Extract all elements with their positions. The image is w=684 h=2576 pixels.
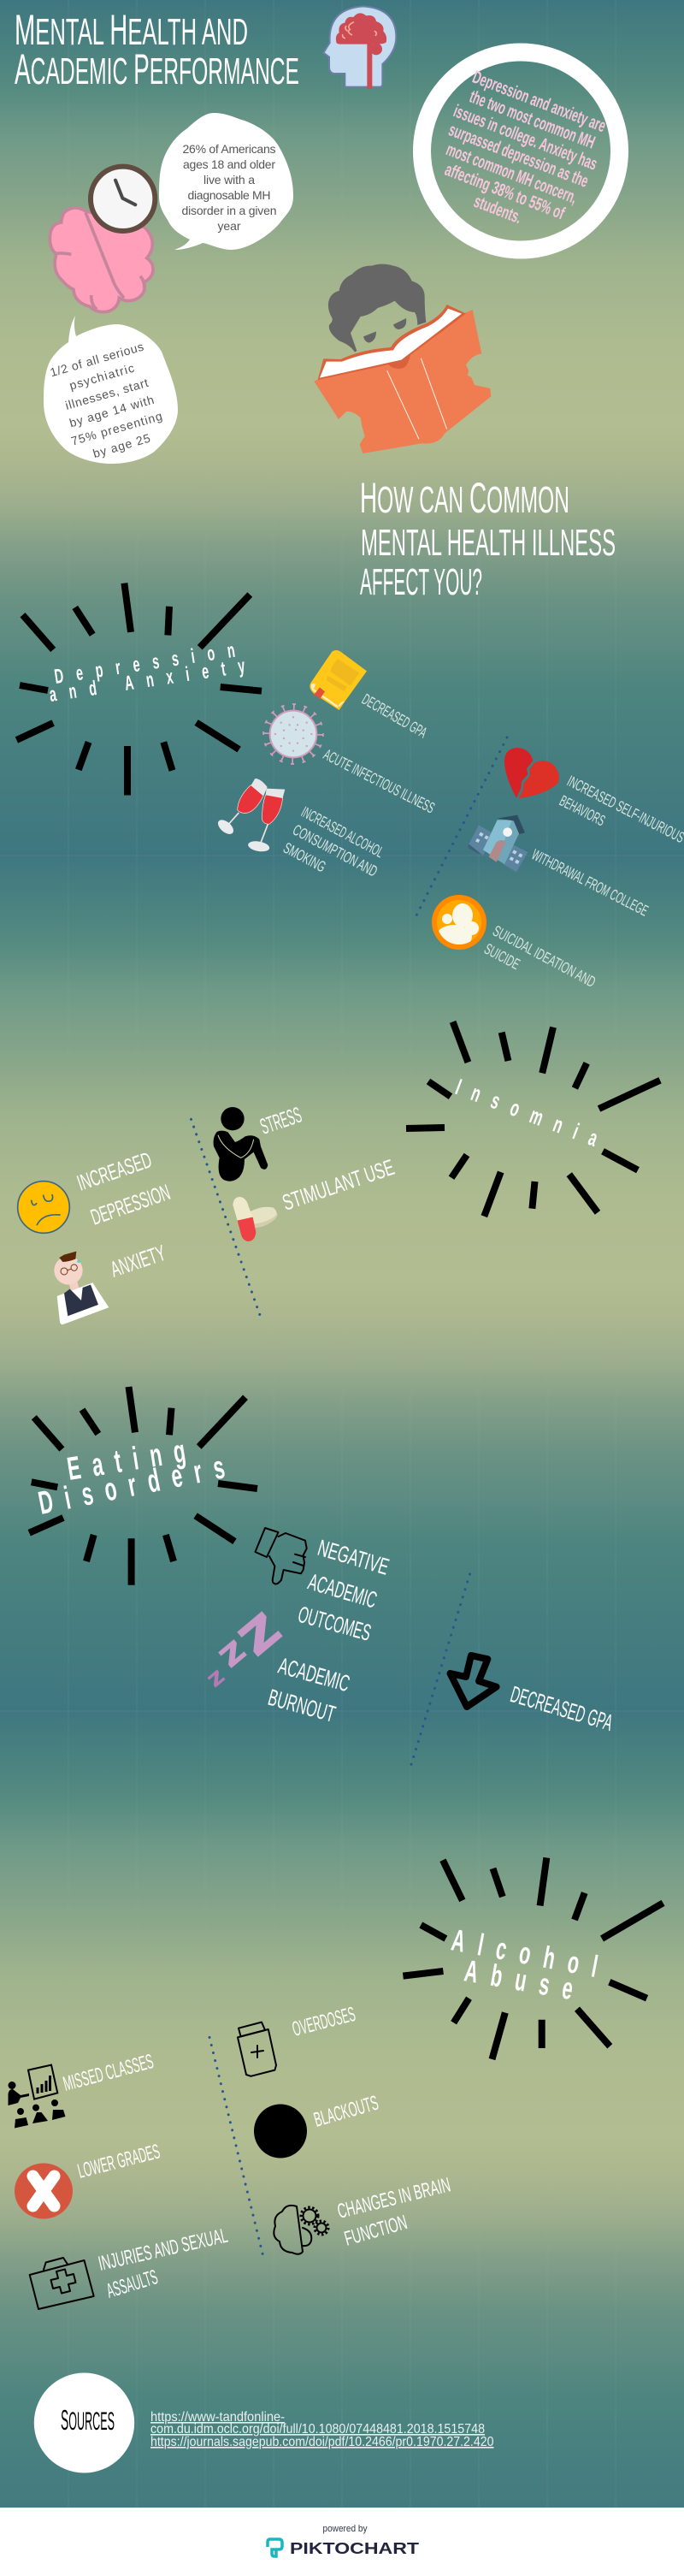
logo wordmark: PIKTOCHART: [290, 2539, 420, 2557]
source links: https://journals.sagepub.com/doi/pdf/10.2466/pr0.1970.27.2.420: [150, 2435, 494, 2449]
label: increased alcohol consumption and smoking: INCREASED ALCOHOL: [298, 803, 386, 861]
logo mark: [268, 2539, 282, 2556]
powered by text: powered by: [323, 2524, 368, 2534]
sources badge: SOURCES: [61, 2404, 115, 2436]
panel: header: [15, 6, 396, 93]
label: academic burnout: [265, 1653, 352, 1727]
panel: depression and anxiety statistic ring: [422, 52, 619, 250]
text: statistic: the two most common MH: [467, 87, 598, 153]
speech bubble: half of illnesses: 75% presenting: [69, 409, 163, 448]
burst title: Abuse: [462, 1954, 575, 2007]
text: statistic: most common MH concern,: [444, 139, 580, 208]
speech bubble: half of illnesses: [44, 316, 178, 465]
speech bubble: half of illnesses: psychiatric: [68, 361, 136, 393]
label: increased self-injurious behaviors: BEHAVIORS: [557, 792, 608, 829]
speech bubble: half of illnesses: by age 25: [91, 431, 152, 460]
label: academic burnout: ACADEMIC: [275, 1653, 352, 1697]
label: injuries and sexual assaults: ASSAULTS: [103, 2265, 161, 2303]
icon: brain with gears: [274, 2206, 328, 2254]
label: increased alcohol consumption and smoking: SMOKING: [280, 839, 328, 875]
ring: [422, 52, 619, 250]
panel: eating disorders: [29, 1387, 616, 1768]
label: academic burnout: BURNOUT: [265, 1685, 338, 1727]
burst title: Alcohol: [449, 1923, 600, 1984]
panel: brain and statistics: [44, 113, 491, 465]
speech bubble: half of illnesses: 1/2 of all serious: [49, 340, 145, 379]
label: suicidal ideation and suicide: SUICIDAL IDEATION AND: [490, 922, 598, 991]
label: blackouts: BLACKOUTS: [311, 2092, 381, 2132]
divider: dotted line: [416, 737, 507, 915]
divider: dotted line: [192, 1119, 261, 1317]
speech bubble: 26 percent: ages 18 and older: [183, 157, 275, 171]
divider: dotted line: [410, 1574, 470, 1768]
label: stimulant use: STIMULANT USE: [279, 1154, 398, 1216]
burst: depression and anxiety: [16, 583, 262, 796]
label: overdoses: OVERDOSES: [290, 2003, 358, 2041]
label: lower grades: LOWER GRADES: [75, 2140, 162, 2183]
title: [15, 6, 299, 93]
source links: https://www-tandfonline-: [150, 2410, 285, 2425]
title: ACADEMIC PERFORMANCE: [15, 45, 299, 93]
burst: alcohol abuse: [403, 1857, 663, 2059]
label: negative academic outcomes: NEGATIVE: [315, 1535, 392, 1580]
text: statistic: affecting 38% to 55% of: [442, 160, 568, 224]
label: anxiety: ANXIETY: [107, 1240, 168, 1282]
speech bubble: half of illnesses: by age 14 with: [68, 393, 156, 429]
label: increased depression: [74, 1146, 174, 1230]
text: statistic: students.: [471, 192, 524, 228]
heading: how can common mental health illness affect you: [360, 474, 616, 603]
speech bubble: 26 percent: 26% of Americans: [183, 142, 275, 156]
panel: insomnia: [18, 1022, 660, 1324]
icon: virus: [263, 704, 323, 764]
panel: depression and anxiety: [16, 583, 684, 991]
panel: sources: [34, 2373, 494, 2472]
speech bubble: 26 percent: [159, 113, 293, 250]
title: MENTAL HEALTH AND: [15, 6, 248, 54]
label: changes in brain function: CHANGES IN BRAIN: [335, 2173, 453, 2224]
icon: first aid kit: [30, 2258, 94, 2309]
speech bubble: 26 percent: year: [217, 219, 241, 233]
label: increased depression: INCREASED: [74, 1146, 155, 1196]
text: statistic: [423, 65, 614, 246]
icon: black circle: [254, 2105, 307, 2158]
icon: college building: [468, 815, 528, 872]
burst: insomnia: [406, 1022, 660, 1217]
icon: family badge: [432, 895, 486, 950]
label: suicidal ideation and suicide: [481, 922, 598, 991]
icon: classroom presenter: [9, 2065, 65, 2129]
label: increased depression: DEPRESSION: [87, 1179, 174, 1230]
label: negative academic outcomes: [295, 1535, 392, 1646]
icon: book: [310, 650, 367, 710]
label: acute infectious illness: ACUTE INFECTIOUS ILLNESS: [321, 746, 438, 816]
burst title: Eating: [65, 1433, 188, 1487]
label: increased self-injurious behaviors: [557, 773, 684, 846]
label: injuries and sexual assaults: INJURIES AND SEXUAL: [97, 2224, 230, 2276]
label: increased alcohol consumption and smoking: CONSUMPTION AND: [290, 821, 380, 880]
footer: [0, 2508, 684, 2576]
icon: wine glasses: [215, 779, 285, 853]
burst: eating disorders: [29, 1387, 257, 1585]
burst title: Disorders: [35, 1448, 227, 1521]
source links: [150, 2410, 494, 2449]
speech bubble: half of illnesses: illnesses, start: [63, 376, 150, 412]
label: decreased GPA: DECREASED GPA: [359, 690, 430, 741]
burst title: and Anxiety: [48, 654, 246, 707]
label: missed classes: MISSED CLASSES: [61, 2050, 156, 2096]
icon: red x: [15, 2163, 73, 2219]
icon: broken heart: [504, 748, 559, 798]
divider: dotted line: [209, 2037, 264, 2259]
label: suicidal ideation and suicide: SUICIDE: [481, 940, 522, 973]
label: changes in brain function: [335, 2173, 453, 2251]
burst title: Depression: [53, 639, 237, 689]
icon: stressed person: [214, 1107, 268, 1181]
icon: thumbs down: [255, 1528, 307, 1584]
icon: down arrow: [450, 1655, 497, 1707]
label: changes in brain function: FUNCTION: [342, 2211, 410, 2251]
label: injuries and sexual assaults: [97, 2224, 230, 2303]
icon: sad face: [18, 1181, 69, 1233]
icon: pills: [233, 1197, 278, 1241]
heading: how can common mental health illness affect you: HOW CAN COMMON: [360, 474, 569, 522]
text: statistic: surpassed depression as the: [445, 120, 591, 192]
icon: head with brain: [323, 6, 396, 89]
panel: alcohol abuse: [9, 1857, 663, 2309]
label: negative academic outcomes: ACADEMIC: [305, 1569, 380, 1614]
sources badge: [34, 2373, 134, 2472]
label: stress: STRESS: [256, 1102, 304, 1140]
icon: sleep z letters: [207, 1611, 283, 1688]
speech bubble: 26 percent: live with a: [203, 173, 255, 187]
speech bubble: 26 percent: disorder in a given: [181, 204, 277, 217]
burst title: Insomnia: [452, 1074, 602, 1152]
icon: brain with clock: [50, 167, 155, 312]
source links: com.du.idm.oclc.org/doi/full/10.1080/07448481.2018.1515748: [150, 2422, 485, 2437]
label: increased alcohol consumption and smoking: [280, 803, 386, 880]
label: negative academic outcomes: OUTCOMES: [295, 1602, 374, 1646]
heading: how can common mental health illness affect you: AFFECT YOU?: [360, 561, 482, 603]
icon: pill bottle: [238, 2022, 276, 2076]
icon: anxious man: [54, 1252, 109, 1324]
speech bubble: 26 percent: diagnosable MH: [188, 188, 270, 202]
icon: person reading book: [314, 264, 491, 453]
